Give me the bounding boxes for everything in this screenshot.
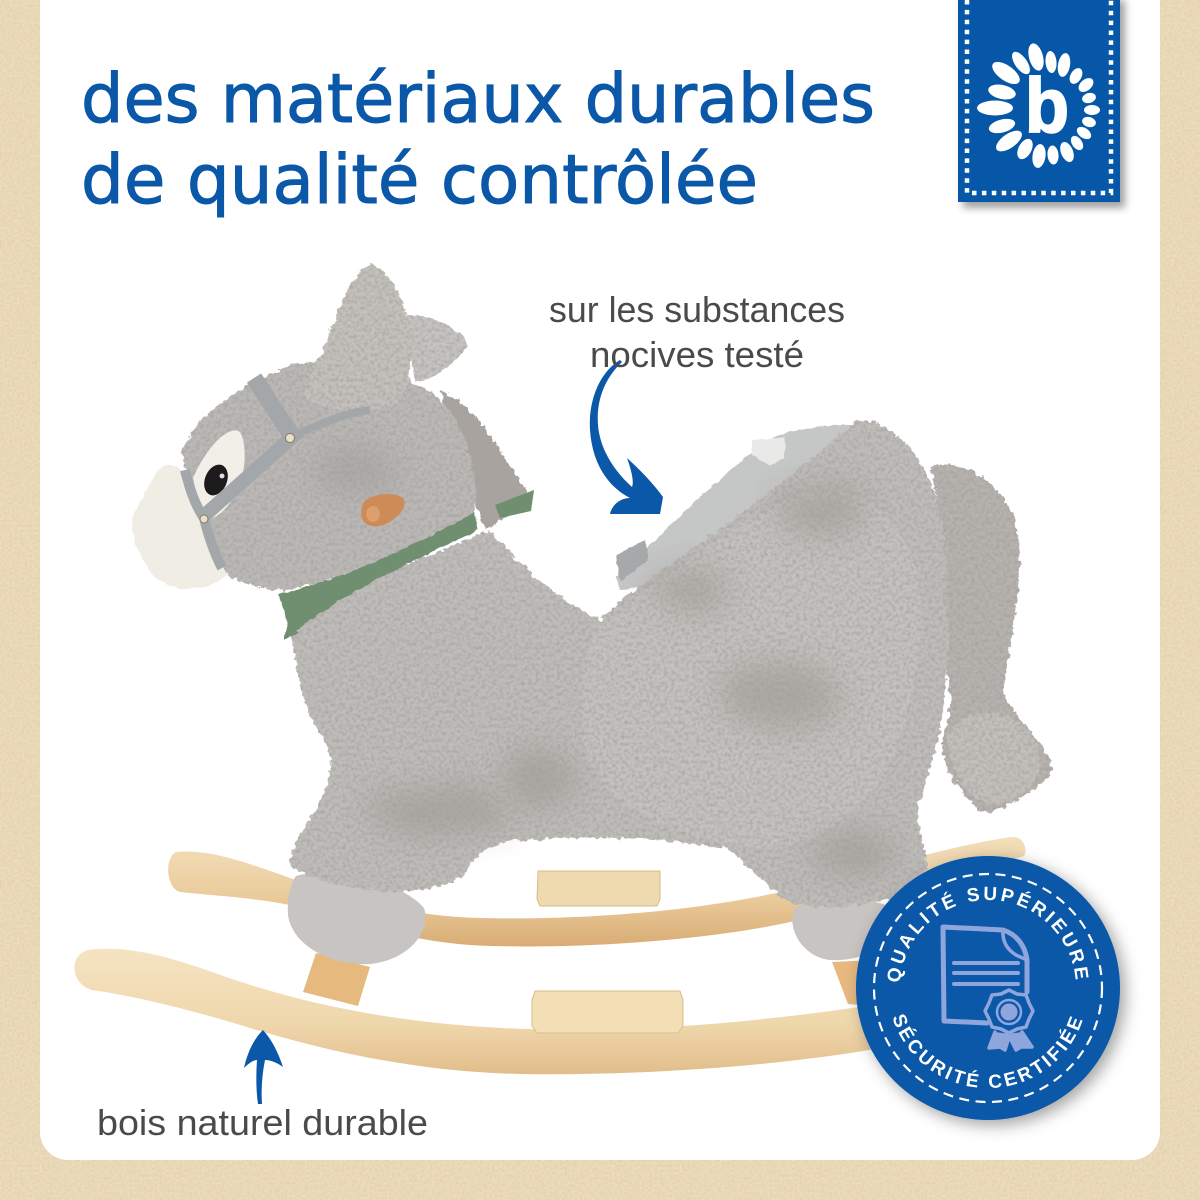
wooden handle	[361, 494, 405, 526]
halter straps	[185, 378, 370, 568]
halter rivets	[200, 434, 294, 523]
muzzle	[132, 464, 227, 589]
haunch fold	[582, 491, 921, 848]
badge curved text	[888, 886, 1089, 1088]
mane	[440, 390, 530, 530]
label: wood: bois naturel durable	[97, 1102, 428, 1143]
certificate seal	[985, 990, 1033, 1050]
front rocker	[75, 949, 880, 1074]
logo letter b: b	[1025, 63, 1069, 149]
arrow: wood	[244, 1030, 283, 1104]
far ear	[405, 315, 468, 382]
head	[132, 263, 476, 590]
eye patch	[193, 430, 245, 519]
badge curved text: SÉCURITÉ CERTIFIÉE	[894, 1014, 1083, 1088]
title: des matériaux durables	[81, 60, 875, 139]
arrow: substances	[590, 360, 663, 514]
front hoof	[288, 873, 426, 964]
label: substances: nocives testé	[590, 334, 804, 375]
back rocker	[168, 837, 1025, 946]
eye	[200, 461, 232, 499]
tail	[930, 464, 1053, 812]
label: substances: sur les substances	[549, 289, 845, 330]
quality badge	[851, 850, 1136, 1136]
fur shading blotches	[370, 484, 900, 875]
label: substances	[549, 289, 845, 375]
title	[81, 60, 875, 220]
rocking donkey illustration	[75, 263, 1053, 1074]
rear hoof	[792, 898, 905, 960]
badge curved text: QUALITÉ SUPÉRIEURE	[888, 886, 1089, 982]
front platform	[532, 991, 683, 1033]
logo flower petals	[977, 42, 1100, 169]
saddle	[616, 425, 880, 590]
body fur	[285, 421, 948, 907]
wooden posts	[303, 953, 875, 1006]
icon: certificate	[943, 927, 1033, 1050]
near ear	[304, 263, 412, 410]
brand logo tag	[958, 0, 1125, 208]
back platform	[537, 871, 660, 906]
scarf back tip	[495, 490, 534, 518]
title: de qualité contrôlée	[81, 141, 758, 220]
head shading	[315, 446, 395, 494]
green scarf	[278, 513, 478, 639]
